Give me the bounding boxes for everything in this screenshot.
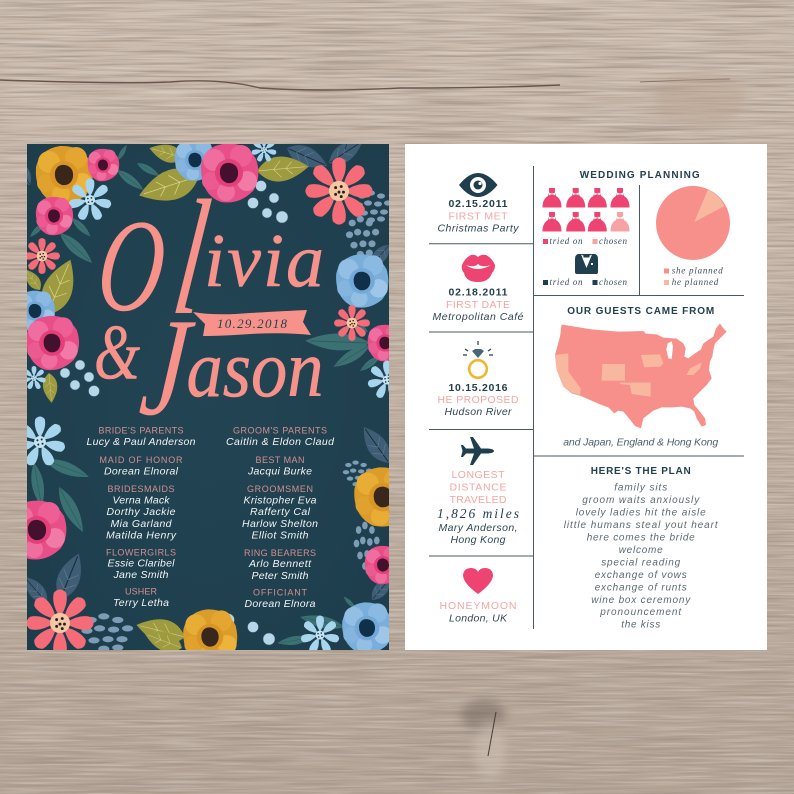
map: United States [555, 323, 727, 428]
legend: dresses: chosen [599, 236, 628, 246]
flower: pale blue daisy [68, 178, 112, 221]
flower: pink rose [26, 316, 79, 370]
legend: dresses [543, 236, 628, 246]
wedding party: right column: Caitlin & Eldon Claud [226, 436, 335, 448]
flower: pale daisy [368, 360, 389, 398]
flower: small daisy [252, 144, 276, 162]
wedding party: right column: BEST MAN [256, 455, 304, 465]
flower: coral daisy [26, 589, 94, 657]
list: ceremony plan: the kiss [621, 620, 660, 630]
panel: floral chalkboard card [27, 144, 389, 650]
wedding party: left column: BRIDE'S PARENTS [98, 426, 184, 436]
wedding party: right column: Peter Smith [252, 570, 309, 582]
panel: white infographic card [405, 144, 767, 650]
heading: wedding planning: WEDDING PLANNING [580, 170, 700, 181]
flower: pink rose [27, 500, 66, 560]
text: first met: FIRST MET [448, 210, 508, 222]
legend: dresses: tried on [550, 236, 583, 246]
list: ceremony plan: here comes the bride [587, 532, 695, 544]
flower: pink rose [368, 324, 389, 362]
icon: heart [463, 568, 493, 594]
berries [60, 180, 288, 645]
flower: pale daisy [27, 416, 65, 466]
wedding party: right column: Dorean Elnora [244, 598, 316, 610]
heading: our guests came from: OUR GUESTS CAME FROM [567, 306, 714, 317]
text: first met: 02.15.2011 [448, 198, 508, 210]
wedding party: right column: Rafferty Cal [250, 506, 311, 518]
caption: other countries: and Japan, England & Hong Kong [563, 436, 718, 448]
list: ceremony plan: welcome [619, 545, 663, 556]
list: ceremony plan: lovely ladies hit the aisle [576, 508, 706, 518]
wedding party: left column [86, 426, 196, 609]
flower: yellow rose [36, 146, 93, 204]
wedding party: right column: Kristopher Eva [244, 494, 317, 506]
title: Olivia: O [91, 193, 172, 339]
text: honeymoon: HONEYMOON [440, 600, 516, 612]
wedding party: left column: Matilda Henry [106, 530, 177, 542]
text: he proposed: 10.15.2016 [448, 382, 508, 394]
title: Jason: J [134, 290, 200, 445]
list: ceremony plan: little humans steal yout heart [564, 520, 719, 531]
wedding party: left column: Terry Letha [113, 597, 169, 609]
flower: coral small daisy [24, 238, 60, 274]
text: longest distance traveled [437, 469, 519, 546]
text: longest distance traveled: Mary Anderson, [438, 522, 518, 534]
text: he proposed: HE PROPOSED [438, 394, 519, 406]
wedding party: right column: Harlow Shelton [242, 518, 318, 530]
pie chart: she planned vs he planned [656, 186, 730, 260]
text: longest distance traveled: Hong Kong [450, 534, 506, 546]
wedding party: left column: Mia Garland [110, 518, 173, 530]
text: longest distance traveled: 1,826 miles [437, 506, 519, 521]
flower: coral daisy [305, 157, 373, 225]
flower: large pink rose [201, 144, 258, 203]
grey-blue sprigs [81, 190, 392, 652]
legend: tuxedo: chosen [599, 277, 628, 287]
list: ceremony plan: groom waits anxiously [582, 495, 700, 506]
list: ceremony plan [564, 482, 719, 630]
wedding party: left column: Dorthy Jackie [106, 506, 176, 518]
flower: coral small daisy [334, 305, 370, 341]
flower: pink rose [88, 149, 119, 181]
title: Jason: ason [186, 323, 324, 414]
wedding party: right column [226, 426, 335, 610]
text: honeymoon: London, UK [449, 612, 508, 624]
list: ceremony plan: special reading [601, 558, 681, 568]
legend: pie [664, 266, 723, 287]
date banner [193, 310, 311, 336]
list: ceremony plan: pronouncement [599, 607, 682, 618]
flower: blue rose [342, 602, 389, 650]
icon: diamond ring [463, 341, 493, 378]
legend: pie: she planned [672, 266, 723, 276]
title: Olivia [91, 166, 324, 349]
wedding party: right column: Elliot Smith [252, 530, 309, 542]
flower: yellow rose [183, 609, 238, 650]
wedding party: right column: Arlo Bennett [248, 558, 312, 570]
flower: blue rose [174, 144, 212, 181]
text: longest distance traveled: DISTANCE [450, 482, 506, 494]
legend: tuxedo: tried on [550, 277, 583, 287]
flower: pink rose [36, 197, 73, 235]
list: ceremony plan: exchange of vows [595, 570, 687, 581]
text: first date: Metropolitan Café [432, 311, 524, 323]
foliage [9, 119, 397, 657]
text: first met: Christmas Party [438, 222, 519, 234]
text: first date [432, 286, 524, 323]
icon: eye [459, 173, 498, 197]
icon: lips [462, 255, 495, 282]
icon: airplane [461, 437, 494, 465]
text: longest distance traveled: TRAVELED [450, 494, 507, 506]
floral border [9, 119, 412, 665]
title: ampersand: & [94, 308, 140, 395]
date banner: 10.29.2018 [217, 316, 288, 331]
wedding party: left column: Essie Claribel [108, 558, 175, 570]
wedding party: right column: GROOMSMEN [247, 484, 313, 494]
wedding party: right column: RING BEARERS [244, 548, 316, 558]
flower: blue rose [27, 290, 56, 330]
flower: pink rose [364, 546, 389, 584]
flower: pale daisy [300, 616, 340, 650]
wedding party: left column: Lucy & Paul Anderson [86, 436, 196, 448]
text: he proposed [438, 382, 519, 418]
title: Jason [134, 290, 324, 445]
list: ceremony plan: exchange of runts [595, 582, 687, 594]
text: longest distance traveled: LONGEST [452, 469, 505, 481]
list: ceremony plan: wine box ceremony [591, 595, 691, 606]
wedding party: left column: BRIDESMAIDS [108, 484, 174, 494]
wedding party: left column: Dorean Elnoral [104, 466, 179, 478]
wedding party: right column: OFFICIANT [253, 588, 308, 598]
wedding party: left column: Verna Mack [112, 494, 170, 506]
text: honeymoon [440, 600, 516, 624]
wedding party: right column: GROOM'S PARENTS [233, 426, 327, 436]
title: Olivia: ivia [204, 219, 324, 303]
pictogram: dresses [542, 188, 630, 232]
text: first date: FIRST DATE [446, 299, 510, 311]
text: he proposed: Hudson River [444, 406, 512, 418]
text: first met [438, 198, 519, 234]
wedding party: left column: MAID OF HONOR [100, 455, 183, 465]
flower: blue rose [336, 254, 388, 308]
legend: tuxedo [543, 277, 628, 287]
legend: pie: he planned [672, 277, 719, 287]
wedding party: left column: USHER [125, 586, 158, 596]
wedding party: left column: Jane Smith [112, 569, 169, 581]
flower: yellow rose [354, 467, 389, 527]
title: Olivia: l [165, 166, 219, 349]
divider lines [429, 166, 744, 629]
text: first date: 02.18.2011 [448, 286, 508, 298]
list: ceremony plan: family sits [614, 482, 667, 494]
icon: tuxedo [575, 254, 598, 274]
heading: here's the plan: HERE'S THE PLAN [591, 466, 691, 477]
wedding party: left column: FLOWERGIRLS [106, 548, 176, 558]
flower: pale daisy [27, 366, 46, 389]
wedding party: right column: Jacqui Burke [247, 466, 312, 478]
